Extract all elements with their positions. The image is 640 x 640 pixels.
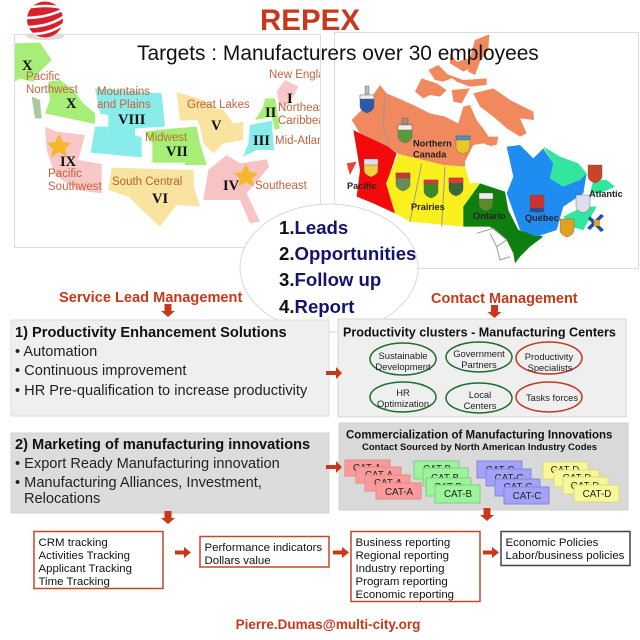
arrow: down to tracking [161, 511, 175, 524]
panel: marketing of manufacturing innovations: Relocations [24, 491, 100, 507]
panel: Canada regions map: Northern [413, 138, 452, 148]
panel: productivity clusters: Specialists [528, 362, 573, 373]
heading: contact management: Contact Management [431, 291, 578, 307]
box: reporting: Business reporting [356, 537, 450, 549]
box: tracking: CRM tracking [38, 537, 108, 549]
box: performance indicators: Performance indicators [204, 542, 322, 554]
panel: steps ellipse [240, 204, 418, 332]
panel: productivity clusters: Sustainable [378, 350, 428, 361]
box: tracking: Activities Tracking [38, 550, 130, 562]
panel: Canada regions map [334, 32, 638, 268]
cards: category D [543, 462, 619, 502]
cards: category D: CAT-D [583, 489, 611, 500]
panel: US regions map: Great Lakes [187, 99, 250, 111]
cards: category A: CAT-A [353, 463, 382, 474]
panel: marketing of manufacturing innovations: • Export Ready Manufacturing innovation [15, 456, 280, 472]
panel: US regions map: II [265, 105, 277, 121]
panel: US regions map: III [253, 133, 270, 149]
panel: US regions map: Midwest [145, 132, 188, 144]
panel: productivity enhancement solutions: 1) Productivity Enhancement Solutions [15, 325, 287, 341]
panel: Canada regions map: Atlantic [589, 189, 623, 199]
panel: US regions map: VIII [118, 112, 146, 128]
panel: US regions map: VII [166, 144, 188, 160]
panel: US regions map: Mountains [97, 86, 150, 98]
contact email: Pierre.Dumas@multi-city.org [236, 617, 420, 632]
cards: category D: CAT-D [571, 481, 599, 492]
box: tracking [34, 532, 163, 588]
arrow: down to solutions [161, 304, 175, 317]
panel: steps ellipse: 1.Leads [279, 217, 348, 238]
panel: US regions map: New England [269, 69, 337, 81]
cards: category A: CAT-A [365, 470, 394, 481]
panel: marketing of manufacturing innovations: 2) Marketing of manufacturing innovations [15, 437, 310, 453]
icon: star Southeast [234, 164, 258, 187]
cards: category D: CAT-D [551, 465, 579, 476]
panel: steps ellipse: 3.Follow up [279, 269, 381, 290]
panel: productivity clusters: Optimization [377, 398, 429, 409]
title: REPEX [260, 4, 360, 37]
panel: productivity clusters: Productivity clusters - Manufacturing Centers [343, 326, 616, 340]
cards: category C: CAT-C [504, 482, 532, 493]
box: policies: Labor/business policies [506, 550, 625, 562]
cards: category B: CAT-B [423, 464, 452, 475]
icon: provincial crests [360, 86, 604, 237]
panel: productivity enhancement solutions [11, 320, 329, 416]
box: reporting: Program reporting [356, 576, 448, 588]
panel: commercialization of manufacturing innovations [339, 423, 628, 510]
panel: productivity enhancement solutions: • Continuous improvement [15, 363, 186, 379]
panel: productivity clusters: HR [396, 387, 410, 398]
panel: productivity clusters [338, 319, 626, 417]
panel: steps ellipse: 2.Opportunities [279, 243, 416, 264]
cards: category C: CAT-C [513, 491, 541, 502]
panel: productivity enhancement solutions: • Automation [15, 344, 97, 360]
panel: productivity clusters: Productivity [525, 351, 574, 362]
panel: Canada regions map: Québec [525, 213, 559, 223]
panel: productivity clusters: Local [469, 389, 491, 400]
panel: US regions map: and Plains [97, 99, 151, 111]
arrow: performance to reporting [333, 547, 349, 558]
cards: category C: CAT-C [486, 465, 514, 476]
box: reporting: Economic reporting [356, 589, 454, 601]
box: performance indicators: Dollars value [204, 555, 271, 567]
cards: category A [345, 460, 421, 499]
arrow: tracking to performance [175, 547, 191, 558]
panel: marketing of manufacturing innovations [11, 433, 329, 513]
panel: productivity clusters: Development [375, 361, 431, 372]
panel: Canada regions map: Pacific [347, 181, 377, 191]
panel: US regions map: X [66, 96, 77, 112]
box: reporting: Industry reporting [356, 563, 445, 575]
box: policies: Economic Policies [506, 537, 599, 549]
heading: service lead management: Service Lead Management [59, 290, 242, 306]
panel: productivity clusters: Tasks forces [526, 392, 578, 403]
panel: US regions map: Northeast [278, 102, 329, 114]
panel: US regions map: VI [152, 191, 168, 207]
cards: category A: CAT-A [385, 487, 414, 498]
arrow: solutions to clusters [326, 367, 342, 379]
cards: category A: CAT-A [374, 478, 403, 489]
panel: US regions map: South Central [112, 176, 182, 188]
panel: Canada regions map: Canada [413, 150, 447, 160]
panel: US regions map: Mid-Atlantic [275, 135, 335, 147]
box: performance indicators [200, 536, 329, 567]
panel: Canada regions map: Ontario [473, 211, 506, 221]
box: tracking: Applicant Tracking [38, 563, 132, 575]
panel: US regions map: IV [223, 178, 240, 194]
cards: category C: CAT-C [495, 473, 523, 484]
panel: US regions map: Northwest [26, 84, 79, 96]
cards: category B [414, 461, 480, 503]
panel: US regions map: Pacific [48, 168, 82, 180]
box: reporting [351, 532, 480, 602]
arrow: reporting to policies [483, 547, 499, 558]
box: tracking: Time Tracking [38, 576, 110, 588]
panel: steps ellipse: 4.Report [279, 296, 354, 317]
box: policies [501, 532, 630, 566]
panel: marketing of manufacturing innovations: • Manufacturing Alliances, Investment, [15, 475, 262, 491]
arrow: down to clusters [488, 305, 502, 318]
cards: category D: CAT-D [563, 473, 591, 484]
panel: US regions map: IX [60, 154, 77, 170]
cards: category B: CAT-B [434, 482, 463, 493]
icon: star Pacific Southwest [47, 134, 71, 157]
cards: category B: CAT-B [444, 489, 473, 500]
panel: US regions map [14, 34, 337, 248]
panel: US regions map: Southwest [48, 181, 103, 193]
panel: US regions map: X [22, 58, 33, 74]
panel: productivity enhancement solutions: • HR Pre-qualification to increase productivity [15, 383, 308, 399]
panel: productivity clusters: Government [453, 348, 505, 359]
panel: US regions map: V [211, 118, 222, 134]
panel: commercialization of manufacturing innovations: Commercialization of Manufacturing Innovations [346, 430, 612, 442]
cards: category C [477, 461, 549, 504]
icon: striped globe logo [24, 2, 66, 40]
panel: productivity clusters: Partners [461, 359, 497, 370]
panel: US regions map: Caribbean [278, 115, 331, 127]
panel: commercialization of manufacturing innovations: Contact Sourced by North American Industry Codes [362, 442, 597, 453]
heading: targets: Targets : Manufacturers over 30 employees [137, 42, 539, 65]
panel: US regions map: I [287, 91, 293, 107]
panel: Canada regions map: Prairies [411, 202, 445, 212]
box: reporting: Regional reporting [356, 550, 449, 562]
cards: category B: CAT-B [431, 473, 460, 484]
arrow: down to policies [480, 508, 494, 521]
panel: US regions map: Southeast [255, 180, 308, 192]
arrow: marketing to commercialization [326, 461, 342, 473]
panel: productivity clusters: Centers [464, 400, 497, 411]
panel: US regions map: Pacific [26, 71, 60, 83]
